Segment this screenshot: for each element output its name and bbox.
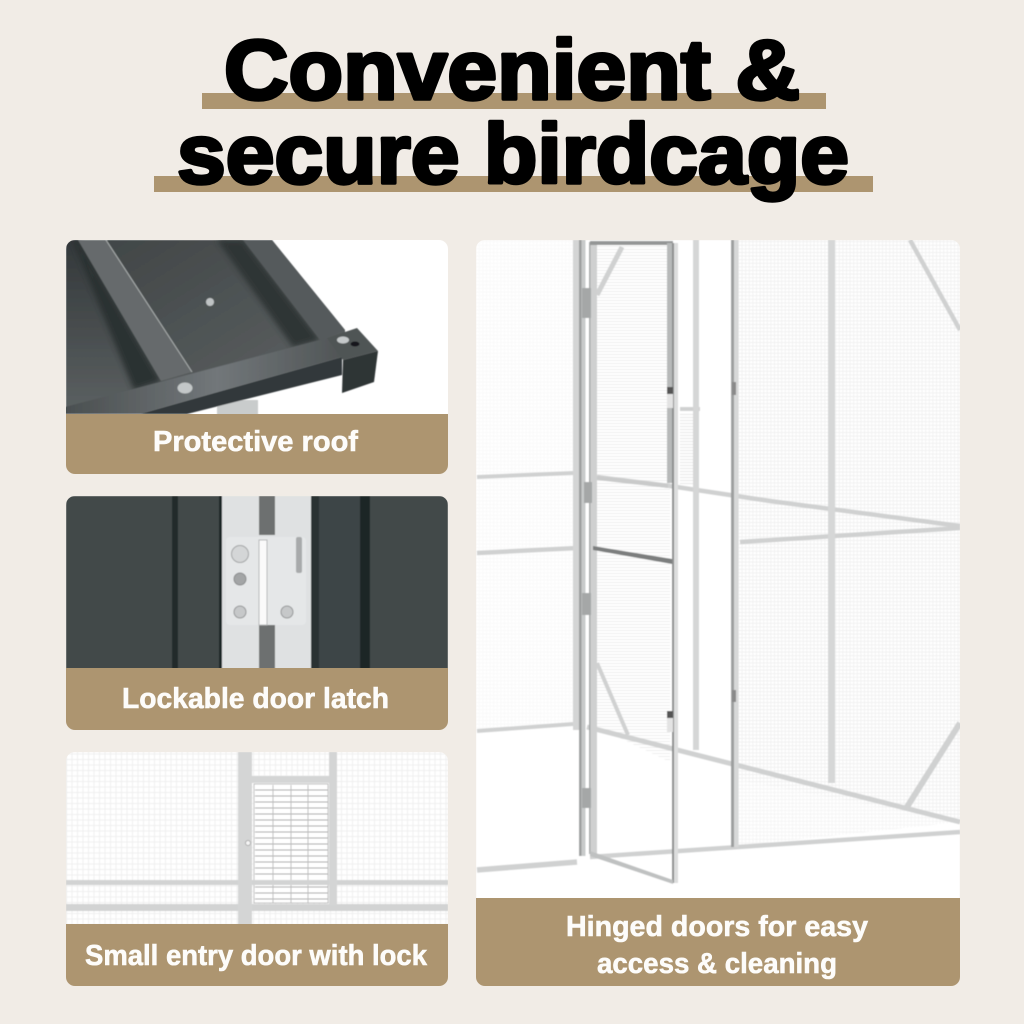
title: secure birdcage xyxy=(177,107,849,201)
caption bar: access & cleaning xyxy=(597,948,837,980)
photo: aviary with open door xyxy=(476,240,960,900)
caption bar: Lockable door latch xyxy=(122,683,389,715)
hinges and latches xyxy=(582,288,736,808)
photo: small entry door xyxy=(66,752,448,926)
panel: lockable door latch xyxy=(66,496,448,730)
open door frame xyxy=(589,241,678,884)
posts xyxy=(573,240,835,856)
title xyxy=(154,23,873,201)
caption bar xyxy=(66,668,448,730)
caption bar: Protective roof xyxy=(153,426,358,458)
panel: hinged doors xyxy=(476,240,960,986)
wall rails and diagonals xyxy=(477,240,960,870)
caption bar: Hinged doors for easy xyxy=(566,911,868,943)
photo: door latch xyxy=(66,496,448,670)
caption bar xyxy=(476,898,960,986)
caption bar xyxy=(66,414,448,474)
title: Convenient & xyxy=(224,23,800,117)
panel: protective roof xyxy=(65,240,448,474)
caption bar: Small entry door with lock xyxy=(85,940,428,972)
caption bar xyxy=(66,924,448,986)
panel: small entry door xyxy=(66,752,448,986)
photo: roof corner xyxy=(65,240,378,416)
